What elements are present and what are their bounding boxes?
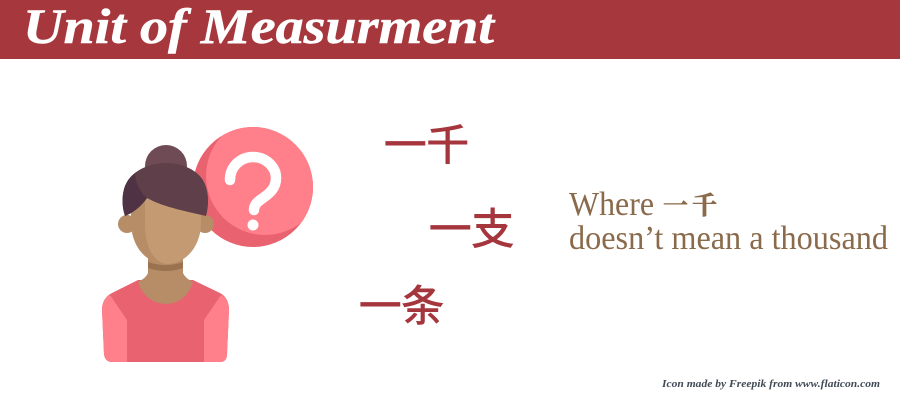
hair (122, 163, 208, 216)
hair bun (145, 145, 187, 187)
ears (118, 215, 136, 233)
attribution: Icon made by Freepik from www.flaticon.com (661, 379, 880, 390)
icon: woman with question mark (102, 117, 324, 362)
measure word: tiao: 一条 (359, 284, 444, 331)
shirt (102, 280, 229, 362)
explanation text: Where (569, 186, 654, 223)
measure word: one thousand: 一千 (384, 123, 469, 170)
measure word: zhi: 一支 (429, 207, 514, 254)
explanation text: 一千 (663, 192, 721, 220)
explanation text: doesn’t mean a thousand (569, 220, 888, 257)
icon: question bubble (195, 127, 313, 247)
neck (138, 258, 193, 304)
face (131, 200, 201, 264)
explanation text (569, 186, 888, 257)
icon: person (102, 145, 229, 362)
header banner (0, 0, 900, 59)
